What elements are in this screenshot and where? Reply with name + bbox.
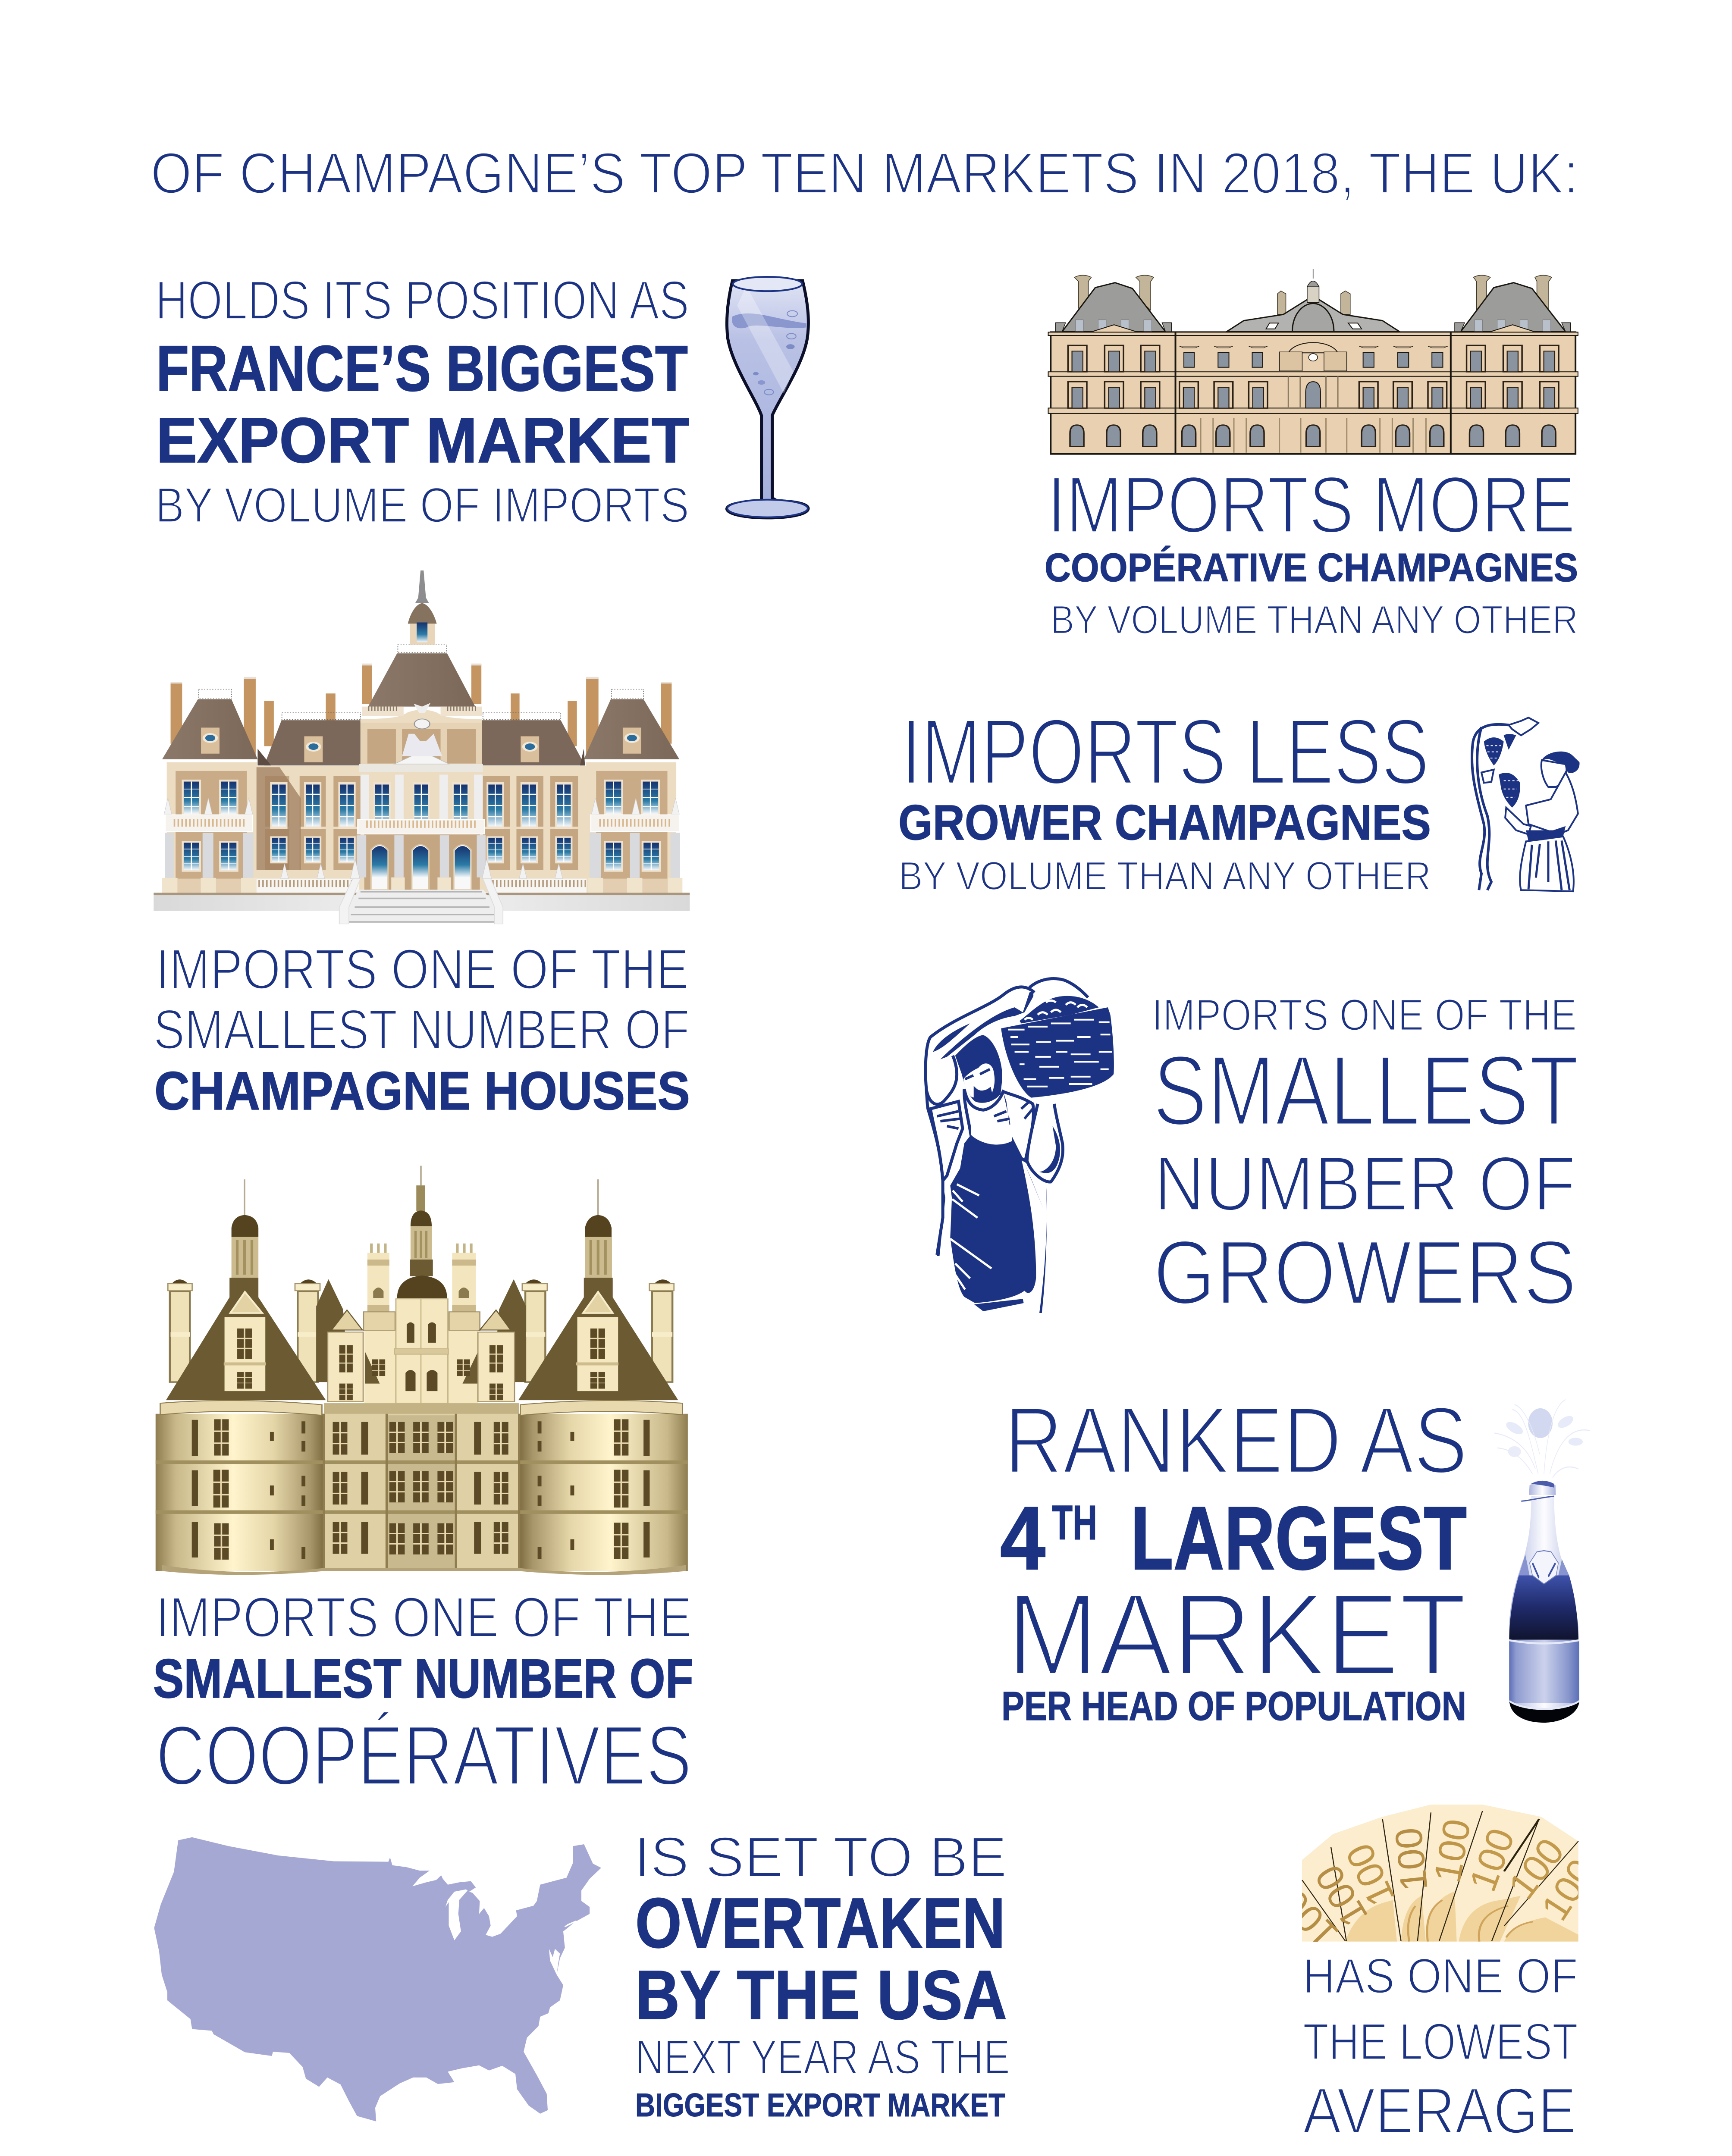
text block: biggest export market: FRANCE’S BIGGEST bbox=[156, 332, 688, 404]
text block: growers: SMALLEST bbox=[1153, 1035, 1579, 1147]
panel: imports more cooperative champagnes bbox=[1045, 269, 1578, 642]
text block: biggest export market: EXPORT MARKET bbox=[156, 405, 689, 476]
icon: woman picking grapes bbox=[1472, 718, 1580, 891]
panel: France's biggest export market bbox=[155, 270, 808, 533]
text block: biggest export market bbox=[155, 270, 689, 533]
text block: biggest export market: BY VOLUME OF IMPORTS bbox=[155, 478, 689, 533]
text block: 4th largest market: RANKED AS bbox=[1004, 1387, 1468, 1493]
icon: fan of banknotes: 100 bbox=[1461, 1823, 1523, 1897]
text block: 4th largest market: PER HEAD OF POPULATION bbox=[1001, 1683, 1466, 1729]
text block: 4th largest market: 4 bbox=[1000, 1489, 1045, 1589]
text block: cooperative champagnes: BY VOLUME THAN ANY OTHER bbox=[1051, 597, 1578, 642]
text block: grower champagnes: GROWER CHAMPAGNES bbox=[898, 795, 1431, 850]
icon: champagne flute bbox=[727, 277, 808, 518]
panel: overtaken by the USA bbox=[154, 1825, 1010, 2124]
text block: champagne houses bbox=[154, 937, 690, 1121]
text block: grower champagnes: BY VOLUME THAN ANY OTHER bbox=[899, 853, 1431, 898]
text block: 4th largest market: TH bbox=[1052, 1495, 1097, 1550]
text block: 4th largest market: LARGEST bbox=[1130, 1489, 1467, 1589]
text block: overtaken by the USA: IS SET TO BE bbox=[634, 1825, 1007, 1889]
icon: fan of banknotes: 100 bbox=[1272, 1881, 1347, 1956]
text block: 4th largest market: MARKET bbox=[1007, 1570, 1467, 1700]
icon: fan of banknotes: 100 bbox=[1337, 1837, 1403, 1912]
icon: fan of banknotes: 100 bbox=[1426, 1816, 1478, 1886]
text block: grower champagnes bbox=[898, 699, 1431, 898]
panel: growers bbox=[926, 979, 1579, 1323]
panel: imports less grower champagnes bbox=[898, 699, 1580, 898]
text block: growers: NUMBER OF bbox=[1154, 1141, 1576, 1227]
text block: lowest average spends bbox=[1299, 1949, 1578, 2156]
text block: cooperatives bbox=[153, 1586, 693, 1803]
text block: champagne houses: CHAMPAGNE HOUSES bbox=[154, 1061, 690, 1121]
text block: overtaken by the USA: BIGGEST EXPORT MARKET bbox=[635, 2087, 1005, 2124]
text block: champagne houses: SMALLEST NUMBER OF bbox=[154, 998, 690, 1061]
panel: champagne houses bbox=[154, 570, 690, 1121]
icon: fan of banknotes: 100 bbox=[1500, 1830, 1572, 1906]
panel: 4th largest market bbox=[1000, 1387, 1590, 1729]
text block: 4th largest market bbox=[1000, 1387, 1468, 1729]
text block: biggest export market: HOLDS ITS POSITION AS bbox=[155, 270, 689, 331]
icon: fan of banknotes bbox=[1302, 1805, 1579, 1942]
icon: grape picker carrying basket bbox=[926, 979, 1114, 1313]
illustration: Chambord-style golden chateau bbox=[156, 1166, 688, 1575]
panel: average spends per bottle bbox=[1302, 1805, 1579, 2133]
text block: overtaken by the USA: OVERTAKEN bbox=[635, 1883, 1005, 1962]
map: contiguous USA bbox=[154, 1837, 601, 2122]
text block: overtaken by the USA: NEXT YEAR AS THE bbox=[635, 2030, 1010, 2084]
text block: growers: IMPORTS ONE OF THE bbox=[1152, 990, 1577, 1040]
text block: growers bbox=[1152, 990, 1579, 1323]
title: OF CHAMPAGNE’S TOP TEN MARKETS IN 2018, THE UK: bbox=[151, 141, 1578, 206]
text block: cooperative champagnes: COOPÉRATIVE CHAMPAGNES bbox=[1045, 545, 1578, 590]
text block: cooperatives: IMPORTS ONE OF THE bbox=[156, 1586, 692, 1649]
text block: lowest average spends: THE LOWEST bbox=[1303, 2013, 1578, 2071]
text block: overtaken by the USA: BY THE USA bbox=[635, 1956, 1007, 2034]
text block: lowest average spends: AVERAGE bbox=[1303, 2074, 1576, 2147]
text block: cooperative champagnes: IMPORTS MORE bbox=[1047, 460, 1575, 550]
icon: fan of banknotes: 100 bbox=[1307, 1858, 1376, 1934]
panel: cooperatives bbox=[153, 1166, 693, 1803]
text block: overtaken by the USA bbox=[634, 1825, 1010, 2124]
text block: champagne houses: IMPORTS ONE OF THE bbox=[156, 937, 689, 1001]
text block: cooperatives: SMALLEST NUMBER OF bbox=[153, 1648, 693, 1710]
text block: growers: GROWERS bbox=[1153, 1221, 1577, 1323]
illustration: Luxembourg palace bbox=[1048, 269, 1578, 454]
icon: fan of banknotes: 100 bbox=[1533, 1851, 1603, 1928]
text block: cooperatives: COOPÉRATIVES bbox=[156, 1708, 692, 1803]
icon: popping champagne bottle bbox=[1494, 1400, 1590, 1723]
text block: grower champagnes: IMPORTS LESS bbox=[901, 699, 1429, 804]
text block: cooperative champagnes bbox=[1045, 460, 1578, 642]
icon: fan of banknotes: 100 bbox=[1387, 1826, 1436, 1893]
illustration: beige French chateau bbox=[154, 570, 690, 924]
text block: lowest average spends: HAS ONE OF bbox=[1303, 1949, 1578, 2004]
